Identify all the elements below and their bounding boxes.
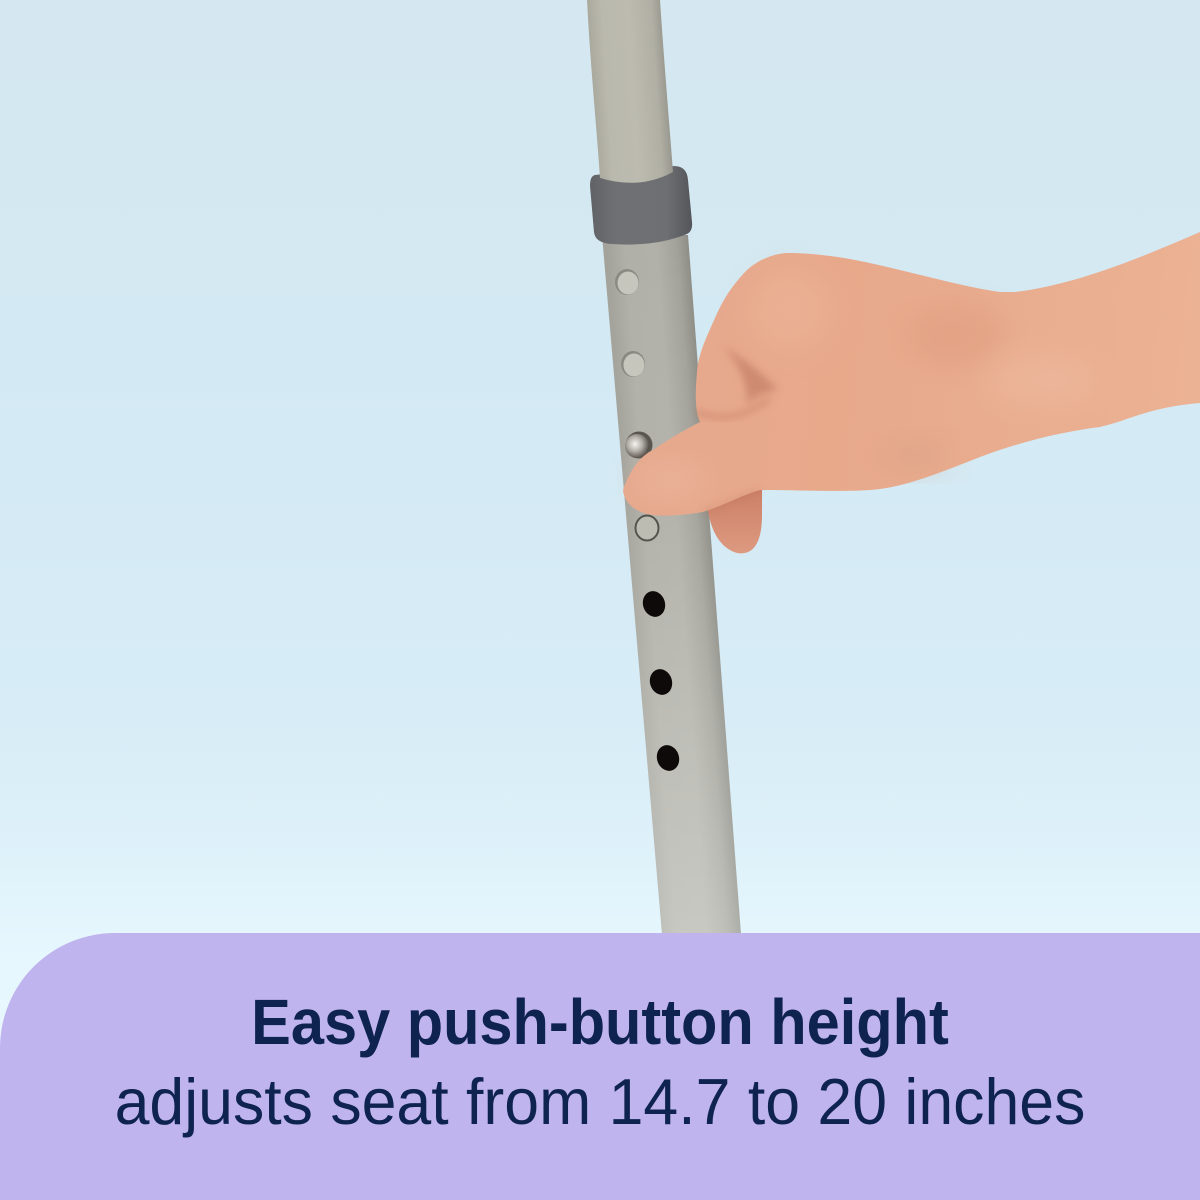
arm and palm <box>623 232 1200 516</box>
push button <box>625 432 652 458</box>
subheading: adjusts seat from 14.7 to 20 inches <box>115 1065 1085 1138</box>
hand <box>623 232 1200 553</box>
adjustment holes <box>615 269 682 774</box>
heading: Easy push-button height <box>251 986 949 1058</box>
lower tube <box>602 235 741 934</box>
lower finger <box>707 480 762 553</box>
upper tube <box>587 0 673 183</box>
caption panel <box>0 933 1200 1200</box>
collar <box>590 166 692 245</box>
finger creases <box>698 345 778 512</box>
hand shading <box>636 270 1095 496</box>
pole assembly <box>587 0 741 934</box>
